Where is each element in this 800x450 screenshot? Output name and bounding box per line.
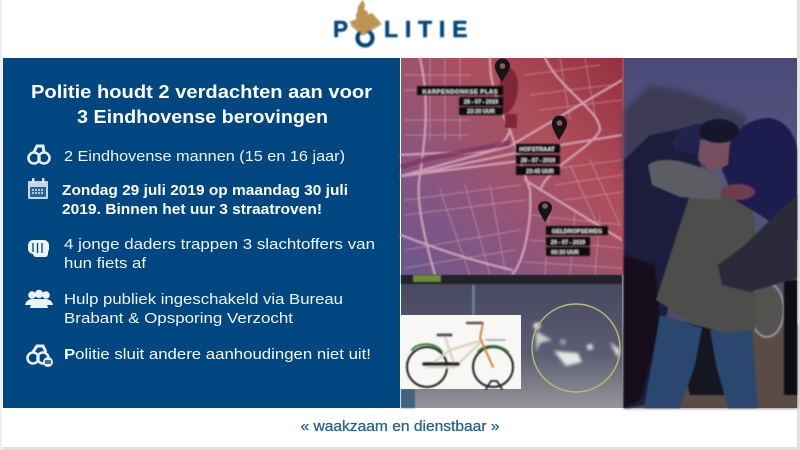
ground [624,325,797,408]
grey arm [648,160,722,200]
text: datum [62,183,348,218]
logo letters [333,16,474,42]
label: Hofstraat: 23:45 UUR [526,169,554,175]
label: Hofstraat: 28 - 07 - 2019 [521,158,555,164]
text: hulp publiek [64,292,343,327]
rail track band [401,143,510,167]
title: Politie houdt 2 verdachten aan voor [31,82,372,102]
slogan: « waakzaam en dienstbaar » [300,418,500,435]
icon: group of people [25,290,53,308]
logo ring [358,30,372,46]
right man hood [722,118,797,240]
hair [699,119,739,143]
label: Hofstraat [516,144,560,175]
label: Karpendonkse Plas: 23:30 UUR [467,109,495,115]
label: Geldropseweg: 29 - 07 - 2019 [551,240,585,246]
pin: Geldropseweg [538,201,552,222]
text: datum: 2019. Binnen het uur 3 straatroven! [62,202,322,218]
left man [624,125,700,408]
text: hulp publiek: Brabant & Opsporing Verzocht [64,311,293,327]
text: mannen: 2 Eindhovense mannen (15 en 16 jaar) [64,149,345,165]
label: Karpendonkse Plas [417,86,503,115]
text: aanhoudingen: Politie sluit andere aanhoudingen niet uit! [64,347,371,363]
text: daders: 4 jonge daders trappen 3 slachtoffers van [64,237,375,253]
label: Geldropseweg: GELDROPSEWEG [552,229,603,235]
yellow circle [532,304,620,392]
text: datum: Zondag 29 juli 2019 op maandag 30 juli [62,183,348,199]
logo: Politie [333,0,474,46]
logo letters: LITIE [384,16,474,42]
label: Karpendonkse Plas: 28 - 07 - 2019 [464,100,498,106]
bicycle wheel [750,283,784,337]
title [31,82,372,127]
title: 3 Eindhovense berovingen [77,107,328,127]
face [698,140,730,172]
trees [624,85,750,170]
icon: handcuffs with badge [28,346,53,367]
cyclist figures [534,322,620,366]
pin: Karpendonkse Plas [495,58,510,82]
icon: calendar [28,178,48,199]
label: Geldropseweg: 00:30 UUR [551,250,579,256]
label: Geldropseweg [546,226,608,256]
photo panel: arrest [622,58,797,408]
panel: blue text panel [3,58,400,408]
icon: fist [28,240,49,257]
water: Karpendonkse Plas [499,66,518,128]
centre jacket [656,190,758,333]
pin: Hofstraat [552,116,567,140]
shadow legs [670,320,725,395]
label: Karpendonkse Plas: KARPENDONKSE PLAS [422,90,498,96]
text: daders: hun fiets af [64,256,147,272]
right man arm [718,195,797,292]
right man legs [784,280,797,395]
map roads [401,58,622,275]
jeans [644,315,702,408]
map panel [401,58,622,285]
icon: flame and book emblem [349,0,381,35]
label: Hofstraat: HOFSTRAAT [519,147,555,153]
text: daders [64,237,375,272]
logo letters: P [333,16,348,42]
hand [721,184,755,200]
bicycle image [401,315,521,389]
icon: handcuffs [28,146,50,164]
blue hood [672,124,706,155]
camera still with circle [401,275,622,408]
text: hulp publiek: Hulp publiek ingeschakeld via Bureau [64,292,343,308]
